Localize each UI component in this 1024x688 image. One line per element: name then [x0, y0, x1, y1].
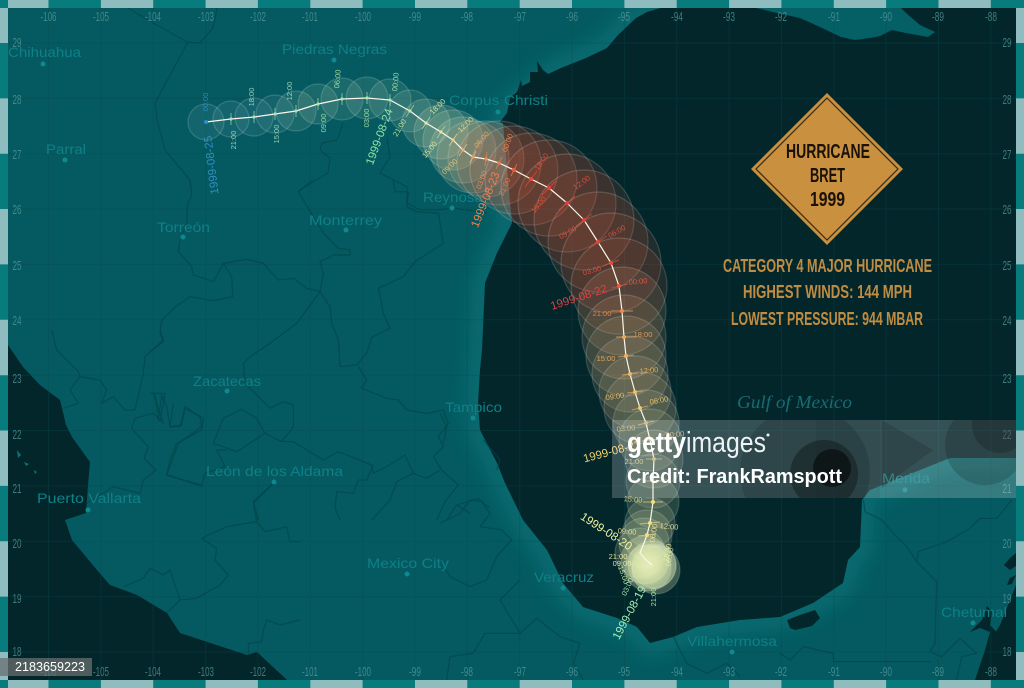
city labels and markers: Veracruz [534, 569, 594, 585]
longitude labels bottom: -103 [198, 665, 214, 679]
latitude labels left: 29 [12, 36, 22, 50]
latitude labels right: 23 [1002, 372, 1012, 386]
latitude labels right: 29 [1002, 36, 1012, 50]
latitude labels left: 21 [12, 482, 22, 496]
city labels and markers: Tampico [445, 399, 502, 415]
time labels along track: 18:00 [634, 330, 652, 339]
time labels along track: 18:00 [533, 151, 551, 172]
time labels along track: 00:00 [628, 276, 648, 287]
time labels along track: 15:00 [529, 195, 548, 215]
track tick marks and points [231, 92, 663, 536]
time labels along track: 09:00 [613, 559, 631, 568]
time labels along track: 00:00 [665, 429, 685, 440]
longitude labels top: -96 [566, 10, 578, 24]
longitude labels top: -89 [932, 10, 944, 24]
latitude labels left: 28 [12, 93, 22, 107]
latitude labels right [1002, 36, 1012, 659]
city labels and markers: Corpus Christi [449, 92, 548, 108]
latitude labels left: 18 [12, 645, 22, 659]
time labels along track: 15:00 [420, 140, 439, 160]
water: Gulf of Mexico [478, 8, 1016, 643]
longitude labels bottom: -90 [880, 665, 892, 679]
city labels and markers: Chetumal [941, 604, 1007, 620]
watermark panel [612, 397, 1024, 537]
latitude labels left: 23 [12, 372, 22, 386]
storm statistics text: CATEGORY 4 MAJOR HURRICANE [723, 256, 932, 276]
latitude labels right: 21 [1002, 482, 1012, 496]
longitude labels bottom: -99 [409, 665, 421, 679]
latitude labels left [12, 36, 22, 659]
longitude labels top: -91 [828, 10, 840, 24]
time labels along track: 21:00 [609, 552, 627, 561]
time labels along track: 00:00 [390, 72, 401, 92]
time labels along track: 03:00 [582, 264, 602, 277]
time labels along track: 21:00 [649, 588, 658, 606]
city labels and markers: Monterrey [309, 212, 382, 228]
time labels along track: 06:00 [647, 523, 660, 543]
time labels along track: 00:00 [500, 132, 515, 153]
date labels along track: 1999-08-19 [611, 584, 649, 642]
city labels and markers: Chihuahua [8, 44, 81, 60]
longitude labels top: -105 [93, 10, 109, 24]
latitude labels left: 22 [12, 428, 22, 442]
longitude labels top: -100 [355, 10, 371, 24]
longitude labels bottom: -100 [355, 665, 371, 679]
longitude labels bottom: -92 [775, 665, 787, 679]
coastal glow on land [478, 8, 1016, 643]
time labels along track: 00:00 [201, 93, 210, 111]
longitude labels top: -101 [302, 10, 318, 24]
longitude labels top: -88 [985, 10, 997, 24]
date labels along track: 1999-08-25 [202, 135, 222, 195]
date labels along track [202, 107, 649, 642]
longitude labels top: -103 [198, 10, 214, 24]
time labels along track: 12:00 [456, 115, 475, 134]
longitude labels top [40, 10, 997, 24]
latitude labels right: 27 [1002, 148, 1012, 162]
time labels along track: 06:00 [606, 223, 627, 240]
track position dots [204, 96, 656, 537]
image id tag [0, 658, 92, 676]
time labels along track: 21:00 [625, 457, 643, 466]
longitude labels bottom: -97 [514, 665, 526, 679]
longitude labels bottom: -101 [302, 665, 318, 679]
date labels along track: 1999-08-21 [582, 439, 642, 465]
time labels along track: 03:00 [619, 576, 636, 597]
time labels along track: 03:00 [362, 109, 371, 127]
longitude labels bottom: -95 [618, 665, 630, 679]
water: Caribbean and east Yucatan details [17, 450, 1016, 680]
water label: Gulf of Mexico: Gulf of Mexico [737, 392, 852, 412]
longitude labels bottom: -106 [40, 665, 57, 679]
longitude labels bottom: -93 [723, 665, 735, 679]
time labels along track: 12:00 [659, 521, 679, 532]
longitude labels top: -90 [880, 10, 892, 24]
latitude labels left: 26 [12, 203, 22, 217]
storm statistics text: HIGHEST WINDS: 144 MPH [743, 282, 912, 302]
title sign: diamond: HURRICANE [786, 141, 870, 163]
storm track line [206, 98, 654, 565]
time labels along track: 06:00 [649, 394, 669, 407]
time labels along track: 09:00 [319, 114, 328, 132]
time labels along track: 12:00 [571, 174, 592, 192]
time labels along track: 09:00 [605, 391, 625, 402]
latitude labels right: 24 [1002, 314, 1012, 328]
time labels along track: 09:00 [557, 224, 578, 241]
time labels along track: 03:00 [616, 423, 636, 434]
longitude labels top: -106 [40, 10, 57, 24]
time labels along track: 15:00 [272, 125, 281, 143]
longitude labels top: -94 [671, 10, 683, 24]
watermark panel: Credit: FrankRamspott [627, 466, 842, 488]
date labels along track: 1999-08-24 [364, 107, 396, 167]
state borders: south Mexico [440, 413, 740, 680]
longitude labels bottom: -105 [93, 665, 109, 679]
latitude labels left: 24 [12, 314, 22, 328]
time labels along track: 03:00 [474, 169, 489, 190]
city labels and markers: Zacatecas [193, 373, 261, 389]
latitude labels right: 25 [1002, 259, 1012, 273]
latitude labels right: 20 [1002, 537, 1012, 551]
date labels along track: 1999-08-20 [578, 511, 634, 553]
time labels along track: 21:00 [391, 117, 408, 138]
latitude labels left: 20 [12, 537, 22, 551]
city labels and markers: Mexico City [367, 555, 449, 571]
time labels along track: 12:00 [285, 82, 294, 100]
longitude labels bottom: -102 [250, 665, 266, 679]
latitude labels right: 28 [1002, 93, 1012, 107]
title sign: diamond: 1999 [810, 189, 845, 211]
time labels along track: 21:00 [593, 309, 611, 318]
time labels along track: 06:00 [332, 69, 343, 89]
time labels along track: 15:00 [623, 494, 643, 505]
time labels along track: 06:00 [472, 130, 491, 150]
longitude labels bottom: -104 [145, 665, 161, 679]
state borders: central Mexico [150, 180, 490, 520]
state borders: north [128, 8, 487, 213]
city labels and markers: Merida [882, 470, 930, 486]
time labels along track: 15:00 [597, 354, 615, 363]
longitude labels bottom: -98 [461, 665, 473, 679]
city labels and markers: Parral [46, 141, 86, 157]
city labels and markers: Puerto Vallarta [37, 490, 141, 506]
watermark panel: getty [627, 427, 686, 459]
longitude labels bottom [40, 665, 997, 679]
city labels and markers: Reynosa [423, 189, 483, 205]
latitude labels right: 19 [1002, 592, 1012, 606]
time labels along track: 21:00 [229, 131, 238, 149]
city labels and markers: Villahermosa [687, 633, 777, 649]
time labels along track [201, 69, 685, 606]
city labels and markers: León de los Aldama [206, 463, 343, 479]
storm core bright glow [625, 542, 671, 588]
latitude labels left: 19 [12, 592, 22, 606]
time labels along track: 12:00 [639, 365, 659, 376]
time labels along track: 18:00 [428, 97, 447, 116]
longitude labels top: -92 [775, 10, 787, 24]
latitude labels right: 22 [1002, 428, 1012, 442]
time labels along track: 18:00 [661, 543, 674, 563]
longitude labels top: -95 [618, 10, 630, 24]
longitude labels top: -104 [145, 10, 161, 24]
date labels along track: 1999-08-23 [469, 170, 503, 230]
water: Pacific Ocean [8, 345, 287, 680]
longitude labels bottom: -94 [671, 665, 683, 679]
date labels along track: 1999-08-22 [549, 283, 609, 313]
latitude labels right: 18 [1002, 645, 1012, 659]
title sign: diamond: BRET [810, 165, 845, 187]
latitude labels right: 26 [1002, 203, 1012, 217]
time labels along track: 18:00 [247, 88, 256, 106]
state borders: west Mexico [52, 330, 300, 655]
longitude labels bottom: -96 [566, 665, 578, 679]
longitude labels top: -98 [461, 10, 473, 24]
watermark panel: images [686, 427, 766, 459]
longitude labels top: -93 [723, 10, 735, 24]
title sign: diamond [751, 93, 903, 245]
longitude labels bottom: -88 [985, 665, 997, 679]
city labels and markers: Torreón [157, 219, 210, 235]
time labels along track: 09:00 [617, 526, 637, 537]
latitude labels left: 27 [12, 148, 22, 162]
longitude labels bottom: -91 [828, 665, 840, 679]
time labels along track: 21:00 [496, 176, 513, 197]
land: Louisiana coast [748, 6, 935, 40]
storm statistics text: LOWEST PRESSURE: 944 MBAR [731, 309, 923, 329]
time labels along track: 00:00 [663, 547, 676, 567]
time labels along track: 15:00 [616, 564, 631, 585]
latitude labels left: 25 [12, 259, 22, 273]
time labels along track: 09:00 [440, 157, 459, 176]
state borders: Yucatan [780, 500, 1012, 680]
longitude labels bottom: -89 [932, 665, 944, 679]
storm statistics text [723, 256, 932, 329]
storm wind radius circles [188, 77, 683, 594]
longitude labels top: -97 [514, 10, 526, 24]
city labels and markers: Piedras Negras [282, 41, 387, 57]
longitude labels top: -99 [409, 10, 421, 24]
image id tag: 2183659223 [15, 659, 85, 674]
longitude labels top: -102 [250, 10, 266, 24]
